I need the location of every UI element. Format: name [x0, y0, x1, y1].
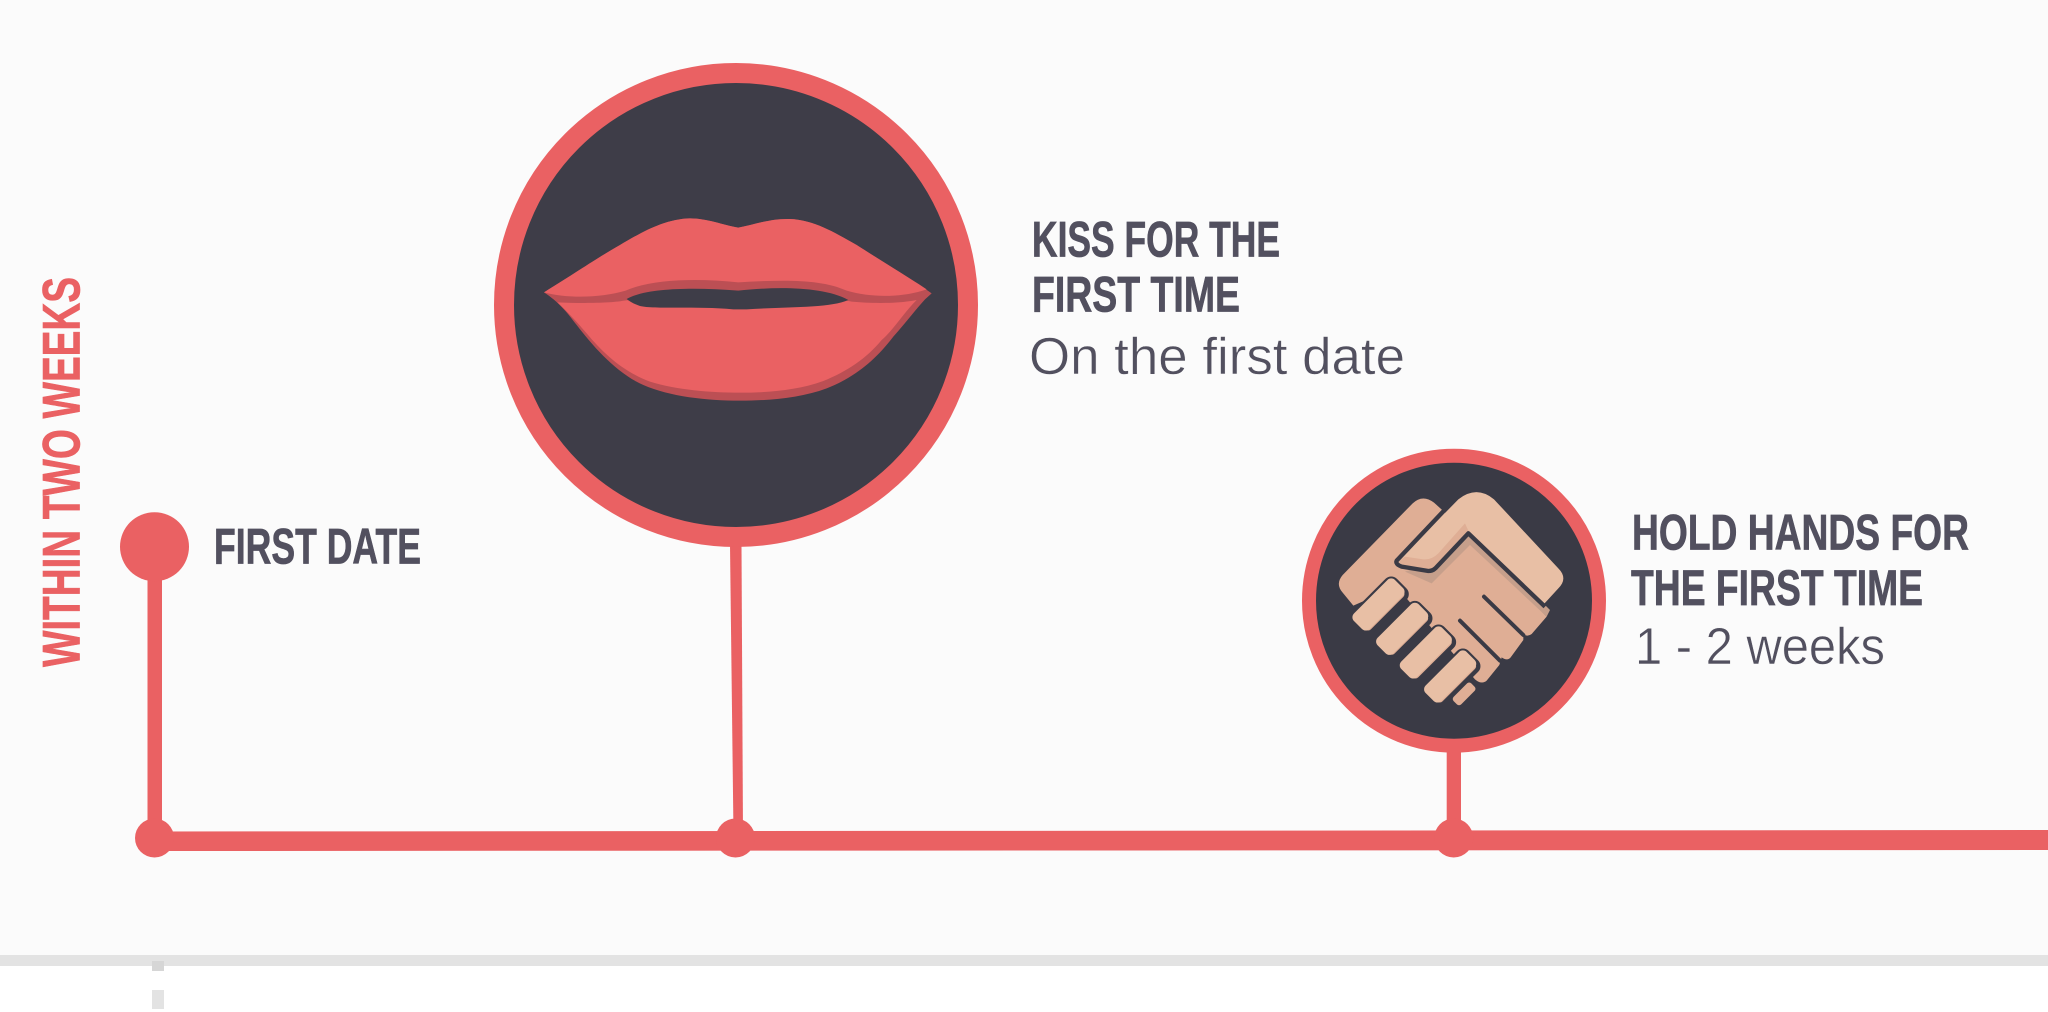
timeline	[120, 512, 2048, 858]
text: kiss: On the first date	[1029, 328, 1405, 386]
text: hands: THE FIRST TIME	[1631, 560, 1923, 616]
kiss circle	[504, 73, 968, 537]
milestone: kiss	[504, 73, 968, 537]
hands circle	[1309, 456, 1599, 746]
text: hands: 1 - 2 weeks	[1635, 618, 1885, 676]
milestone: hands	[1309, 456, 1599, 746]
vertical label: WITHIN TWO WEEKS	[32, 277, 92, 667]
panel bottom edge	[0, 955, 2048, 966]
text: kiss	[1029, 212, 1405, 386]
dashed connector	[152, 961, 164, 1009]
icon: handshake	[1339, 492, 1563, 707]
label: first date: FIRST DATE	[214, 518, 421, 574]
text: kiss: FIRST TIME	[1032, 267, 1240, 323]
icon: lips	[544, 218, 932, 401]
text: hands	[1631, 504, 1969, 676]
text: kiss: KISS FOR THE	[1032, 212, 1280, 268]
